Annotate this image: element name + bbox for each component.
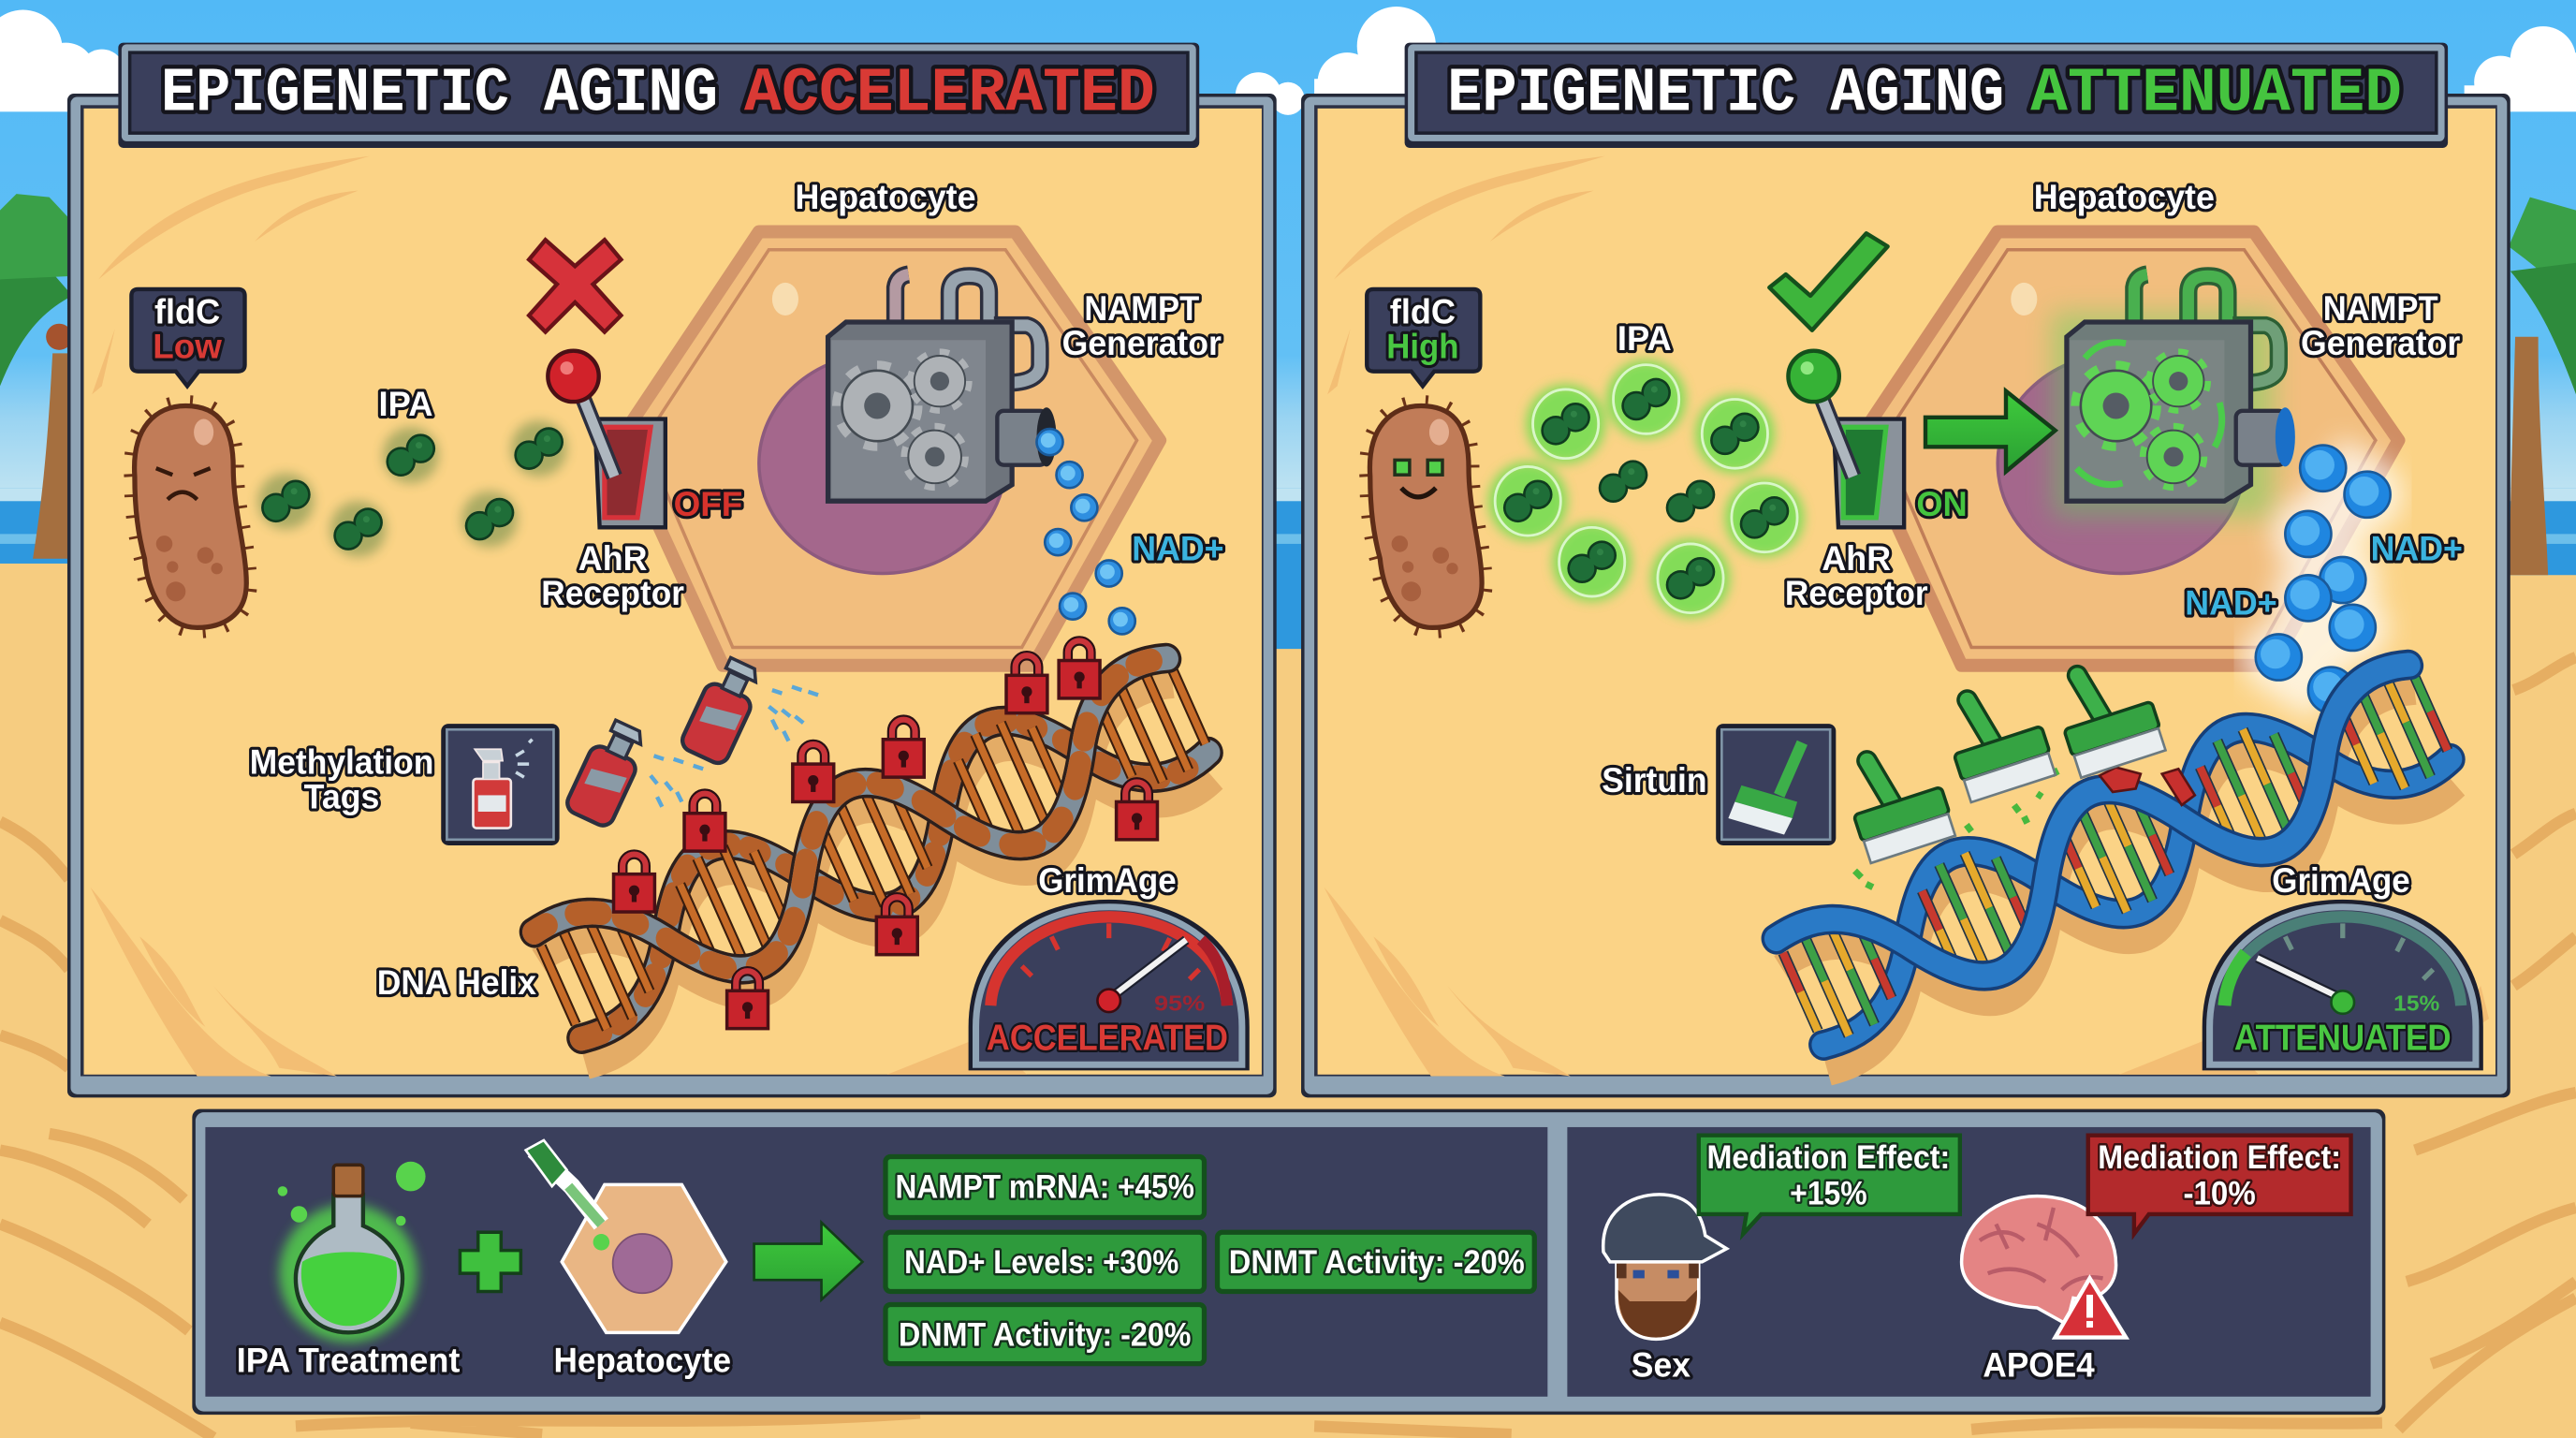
label: Sirtuin: Sirtuin xyxy=(1602,761,1707,800)
stat: DNMT Activity side: DNMT Activity: -20% xyxy=(1229,1244,1525,1281)
hepatocyte cell xyxy=(620,231,1160,666)
label: NAMPT Generator xyxy=(1062,289,1222,362)
stat: NAMPT mRNA: NAMPT mRNA: +45% xyxy=(896,1168,1194,1205)
nucleus xyxy=(1998,353,2244,574)
palm tree left xyxy=(0,194,72,559)
label: Hepatocyte: Hepatocyte xyxy=(795,178,976,216)
stat: DNMT Activity: DNMT Activity: -20% xyxy=(899,1316,1191,1353)
panel: accelerated xyxy=(67,94,1277,1097)
label: GrimAge: GrimAge xyxy=(2272,861,2410,900)
gauge: attenuated: 15% xyxy=(2393,990,2439,1015)
NAD+ droplets xyxy=(1036,429,1135,634)
label: AhR Receptor: AhR xyxy=(1822,539,1891,578)
gauge: accelerated xyxy=(971,902,1247,1068)
NAD+ droplets abundant xyxy=(2256,446,2391,713)
label: Methylation Tags: Methylation xyxy=(250,743,433,782)
IPA molecules glowing xyxy=(1488,360,1804,618)
panel: bottom results xyxy=(192,1109,2385,1415)
label bubble: fldC Low: Low xyxy=(153,328,222,366)
label: Hepatocyte: Hepatocyte xyxy=(553,1341,731,1379)
label: AhR Receptor: AhR xyxy=(578,539,648,578)
icon: red X xyxy=(529,240,621,332)
spray bottles xyxy=(564,653,818,829)
label: OFF: OFF xyxy=(674,485,742,523)
icon: plus xyxy=(460,1232,520,1291)
gauge: accelerated: 95% xyxy=(1154,990,1205,1015)
stat: NAD+ Levels xyxy=(886,1232,1204,1291)
label: AhR Receptor: Receptor xyxy=(541,574,684,612)
NAMPT generator machine active xyxy=(2052,274,2295,518)
label: ON: ON xyxy=(1916,485,1968,523)
sirtuin icon xyxy=(1719,726,1834,843)
icon: man face xyxy=(1603,1195,1727,1339)
panel: attenuated xyxy=(1301,94,2510,1097)
AhR lever on xyxy=(1788,351,1904,527)
icon: hepatocyte mini xyxy=(562,1184,726,1332)
label: Methylation Tags: Tags xyxy=(304,777,379,815)
label: GrimAge: GrimAge xyxy=(1038,861,1177,900)
DNA helix healthy xyxy=(1767,653,2467,1078)
bacterium low xyxy=(135,405,246,627)
arrow: result xyxy=(754,1223,862,1299)
label bubble: fldC High: fldC xyxy=(1390,293,1456,331)
label bubble: fldC Low xyxy=(131,289,245,386)
methylation tags icon xyxy=(444,726,557,843)
stat: DNMT Activity xyxy=(886,1304,1204,1364)
callout: sex mediation xyxy=(1699,1136,1960,1234)
title: attenuated xyxy=(1405,43,2448,148)
icon: brain with warning xyxy=(1962,1196,2126,1338)
label: NAD+ right: NAD+ xyxy=(2371,529,2463,567)
label: NAD+ left: NAD+ xyxy=(2185,583,2277,622)
label bubble: fldC High xyxy=(1367,289,1480,386)
label bubble: fldC High: High xyxy=(1386,328,1459,366)
label: NAMPT Generator: NAMPT xyxy=(2323,289,2438,328)
palm tree right xyxy=(2509,198,2576,575)
title: attenuated: ATTENUATED xyxy=(2030,59,2402,130)
label: NAMPT Generator: Generator xyxy=(1062,324,1222,362)
title: accelerated xyxy=(118,43,1199,148)
callout: APOE4 mediation: -10% xyxy=(2184,1175,2256,1211)
label: NAMPT Generator: NAMPT xyxy=(1084,289,1200,328)
gauge: attenuated xyxy=(2204,902,2481,1068)
label: Methylation Tags xyxy=(250,743,433,815)
IPA molecules sparse xyxy=(258,420,567,557)
title: accelerated: ACCELERATED xyxy=(744,59,1155,130)
stat: NAMPT mRNA xyxy=(886,1157,1204,1217)
callout: APOE4 mediation xyxy=(2088,1136,2351,1234)
bacterium high xyxy=(1369,405,1482,627)
label: IPA: IPA xyxy=(379,385,432,423)
label: NAMPT Generator: Generator xyxy=(2301,324,2460,362)
title: accelerated: EPIGENETIC AGING xyxy=(161,59,718,130)
icon: IPA flask xyxy=(278,1162,426,1343)
methylation locks xyxy=(614,640,1157,1029)
stat: DNMT Activity side xyxy=(1218,1232,1534,1291)
label: APOE4: APOE4 xyxy=(1983,1346,2095,1385)
stat: NAD+ Levels: NAD+ Levels: +30% xyxy=(904,1244,1178,1281)
label: IPA Treatment: IPA Treatment xyxy=(237,1341,460,1379)
label: DNA Helix: DNA Helix xyxy=(377,963,537,1002)
NAMPT generator machine xyxy=(828,274,1057,501)
callout: sex mediation: Mediation Effect: xyxy=(1707,1139,1950,1176)
AhR lever off xyxy=(548,351,666,527)
gauge: accelerated: ACCELERATED xyxy=(987,1018,1228,1058)
label: AhR Receptor xyxy=(541,539,684,612)
callout: sex mediation: +15% xyxy=(1790,1175,1867,1211)
callout: APOE4 mediation: Mediation Effect: xyxy=(2098,1139,2341,1176)
label: AhR Receptor: Receptor xyxy=(1785,574,1928,612)
icon: green check xyxy=(1769,233,1888,330)
label: NAMPT Generator xyxy=(2301,289,2460,362)
label: IPA: IPA xyxy=(1617,319,1672,358)
arrow: to generator xyxy=(1925,391,2056,472)
label bubble: fldC Low: fldC xyxy=(154,293,220,331)
label: Hepatocyte: Hepatocyte xyxy=(2034,178,2215,216)
nucleus xyxy=(759,353,1005,574)
title: attenuated: EPIGENETIC AGING xyxy=(1447,59,2004,130)
hepatocyte cell xyxy=(1858,231,2398,666)
label: NAD+: NAD+ xyxy=(1132,529,1224,567)
DNA helix rusty xyxy=(525,646,1225,1072)
gauge: attenuated: ATTENUATED xyxy=(2234,1018,2452,1058)
removed methyl tags xyxy=(1855,768,2195,888)
label: AhR Receptor xyxy=(1785,539,1928,612)
icon: dropper xyxy=(526,1140,609,1251)
sirtuin brushes xyxy=(1839,656,2167,863)
label: Sex: Sex xyxy=(1632,1346,1690,1385)
